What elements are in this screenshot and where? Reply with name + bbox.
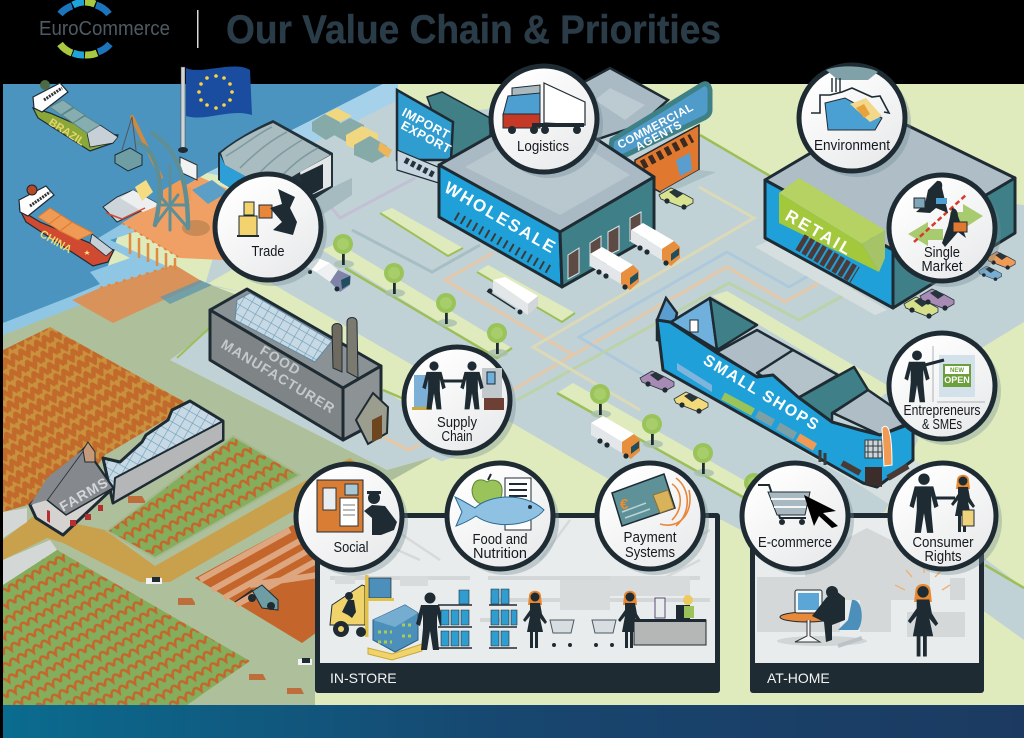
tan farm road: [3, 458, 365, 582]
woman on phone: [895, 565, 950, 656]
retail sign text: RETAIL: [782, 206, 857, 260]
cars: [640, 188, 1015, 414]
title: Our Value Chain & Priorities: [226, 8, 721, 52]
store background: [330, 520, 710, 580]
commercial agents sign text: COMMERCIAL: [616, 102, 696, 152]
icon: apple, fish and label: [455, 474, 544, 530]
icon: shop owner and open sign: NEW: [950, 368, 964, 374]
at-home label: AT-HOME: [767, 670, 830, 686]
arched warehouse: [218, 120, 352, 215]
badge: consumer rights: Rights: [924, 548, 962, 565]
green crop field: [107, 436, 300, 558]
food manufacturer factory: MANUFACTURER: [218, 336, 338, 417]
icon: payment card: €: [620, 496, 629, 513]
badge: single market: Market: [922, 258, 963, 275]
product shelves: [438, 589, 517, 648]
commercial agents office: [560, 68, 716, 192]
tractor: [235, 585, 278, 610]
pale strip behind shops: [712, 291, 892, 398]
icon: handshake with goods: [412, 361, 504, 410]
pallet of boxes: [368, 605, 422, 660]
icon: travellers crossing border: [908, 181, 983, 247]
import export sign text: IMPORT: [400, 105, 452, 142]
farms sign text: FARMS: [56, 474, 111, 515]
badge: e-commerce: [742, 463, 854, 575]
cargo ship at dock: [103, 180, 160, 222]
badge: consumer rights: [890, 463, 1002, 575]
icon: shop owner and open sign: OPEN: [944, 375, 970, 385]
badge: payment systems: Systems: [625, 544, 675, 561]
ship: Brazil: [33, 80, 118, 151]
icon: consumer and shop assistant: [910, 474, 975, 533]
badge: trade: [215, 174, 327, 286]
commercial agents office: AGENTS: [634, 119, 684, 154]
badge: single market: [889, 175, 1001, 287]
badge: food and nutrition: Food and: [472, 531, 528, 548]
panel: at-home: [750, 513, 984, 693]
trees: [333, 234, 765, 507]
shopper at checkout: [592, 591, 706, 648]
home background: [757, 528, 965, 637]
badge: environment: Environment: [814, 137, 891, 154]
forklift: [330, 575, 394, 637]
badge: supply chain: Supply: [437, 414, 477, 431]
ploughed field: [195, 525, 320, 643]
badge: entrepreneurs and SMEs: Entrepreneurs: [904, 402, 980, 419]
badge: payment systems: [597, 463, 709, 575]
badge: entrepreneurs and SMEs: [889, 333, 1001, 445]
icon: pallet and customs officer: [237, 189, 297, 237]
stock worker: [416, 592, 444, 650]
farm buildings: [30, 401, 223, 535]
retail building: [755, 112, 1015, 315]
divider: [197, 10, 198, 48]
badge: supply chain: [404, 347, 516, 459]
badge: logistics: [491, 66, 603, 178]
trucks: [305, 223, 680, 459]
road right of at-home panel: [960, 540, 1024, 640]
wheat field: [3, 327, 190, 512]
badge: payment systems: Payment: [624, 529, 677, 546]
badge: food and nutrition: [447, 463, 559, 575]
food manufacturer factory: [210, 289, 388, 444]
badge: e-commerce: E-commerce: [758, 534, 832, 551]
pale routes: [325, 178, 415, 218]
ship name: CHINA: [38, 228, 74, 256]
logo: EuroCommerce: EuroCommerce: [39, 18, 170, 40]
badge: consumer rights: Consumer: [912, 534, 974, 551]
big crop field: [3, 550, 250, 705]
import export office: [397, 90, 490, 185]
pale area above the panels: [420, 440, 620, 530]
badge: social: [296, 464, 408, 576]
icon: notice board and worker: [317, 480, 397, 535]
small shops building: [657, 298, 935, 505]
badge: trade: Trade: [252, 243, 284, 260]
icon: shop owner and open sign: [904, 346, 985, 402]
wholesale sign text: WHOLESALE: [441, 178, 560, 258]
badge: entrepreneurs and SMEs: & SMEs: [922, 416, 962, 433]
green median strips: [380, 208, 575, 322]
badge: food and nutrition: Nutrition: [473, 545, 527, 562]
wholesale building: [439, 105, 654, 287]
badge: social: Social: [334, 539, 368, 556]
small truck with purple cab: [305, 258, 351, 292]
shopper with cart: [523, 591, 574, 648]
bottom band: [3, 705, 1024, 738]
farmland: [3, 282, 433, 705]
icon: lorry: [503, 83, 585, 134]
water: [3, 84, 383, 323]
road network base: [170, 84, 1024, 535]
ship: China: [19, 185, 114, 266]
badge: supply chain: Chain: [442, 428, 472, 445]
crane: [115, 117, 197, 230]
ship name: BRAZIL: [46, 116, 87, 149]
EU flag: [178, 66, 252, 153]
pale strip with lower trees: [557, 383, 770, 501]
panel: in-store: [315, 513, 720, 693]
farm animals: [128, 496, 312, 694]
grey farm lane: [3, 508, 57, 585]
logo: EuroCommerce: [39, 2, 170, 55]
factory sign text: FOOD: [257, 342, 304, 378]
icon: recycling skip and factory: [811, 66, 889, 130]
badge: logistics: Logistics: [517, 138, 569, 155]
pale strip with trees: [322, 243, 512, 358]
badge: environment: [799, 65, 911, 177]
person at computer: [777, 586, 867, 646]
small shops sign text: SMALL SHOPS: [700, 352, 823, 435]
icon: cart and cursor: [758, 485, 838, 528]
stacked containers: [312, 108, 392, 163]
orange pier: [72, 177, 240, 323]
import export office: EXPORT: [399, 118, 454, 156]
pale strip behind factory: [207, 265, 655, 515]
badge: single market: Single: [924, 244, 960, 261]
trailer on the road: [487, 277, 538, 315]
in-store label: IN-STORE: [330, 670, 397, 686]
